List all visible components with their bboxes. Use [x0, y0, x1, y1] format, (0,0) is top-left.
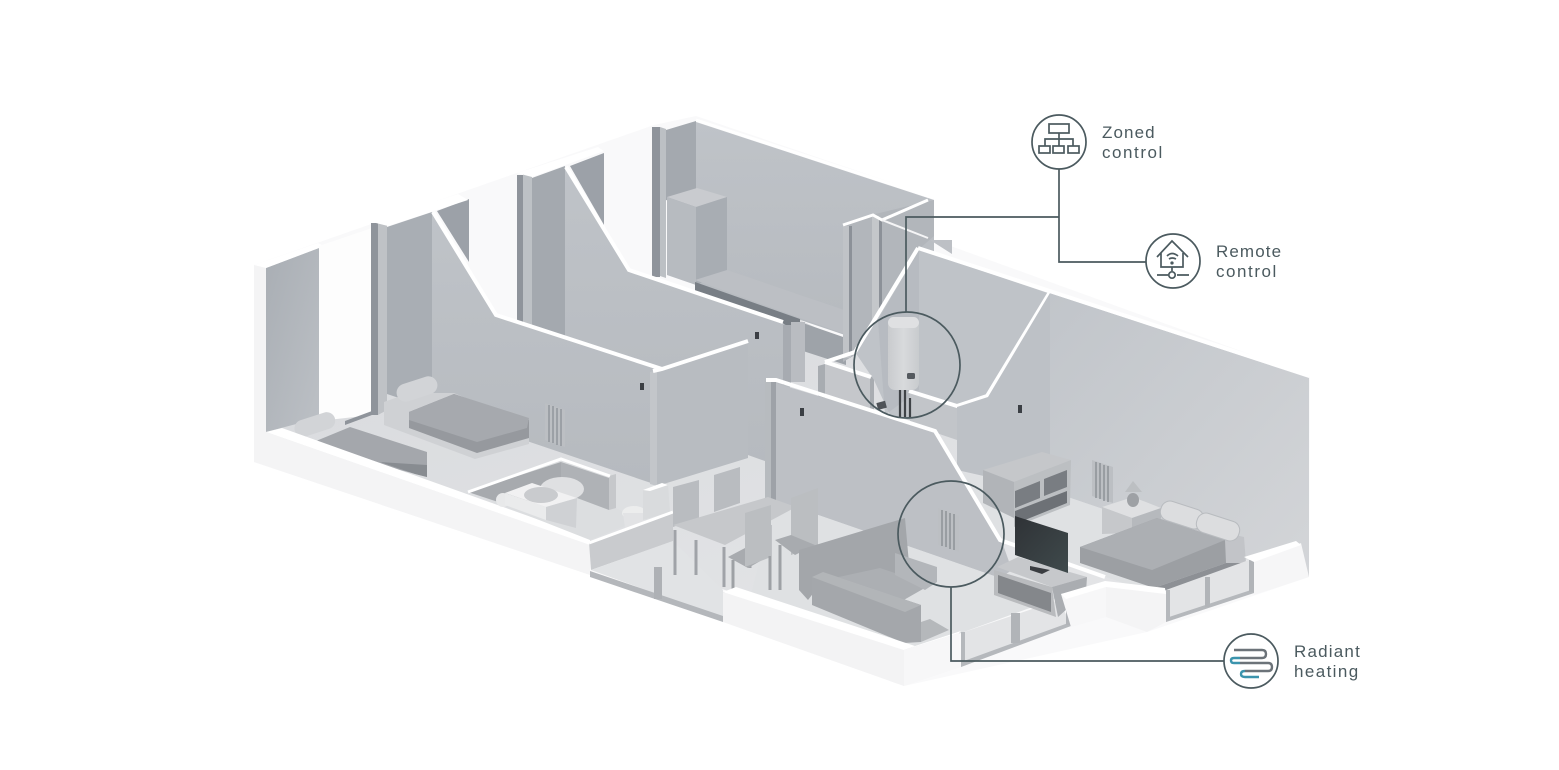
label: remote control: control — [1216, 262, 1278, 281]
label: zoned control: Zoned — [1102, 123, 1156, 142]
table legs — [675, 525, 770, 587]
bathroom — [468, 458, 640, 540]
dining table and chairs — [673, 467, 818, 590]
label: remote control: Remote — [1216, 242, 1282, 261]
shelf unit — [983, 452, 1071, 527]
left bedroom partition wall — [371, 194, 748, 486]
switch: living room — [800, 408, 804, 416]
floor: living room — [750, 500, 1060, 650]
kitchen counter — [695, 270, 850, 365]
radiator: left bedroom — [545, 403, 565, 447]
apartment model — [254, 116, 1310, 686]
callout: remote control — [1146, 234, 1282, 288]
balcony — [589, 511, 725, 622]
floor — [265, 320, 1302, 650]
nightstand with lamp — [1102, 481, 1161, 534]
callout: zoned control — [1032, 115, 1164, 169]
icon: zoned control — [1032, 115, 1086, 169]
connector: zoned and remote control — [1059, 169, 1146, 262]
icon: radiant heating — [1224, 634, 1278, 688]
pillow right — [1194, 511, 1242, 543]
window post — [1011, 613, 1020, 643]
room: top back room — [652, 120, 934, 365]
boiler pipes — [900, 390, 910, 417]
toilet — [622, 483, 670, 535]
front wall: apex — [723, 587, 961, 686]
callouts — [854, 169, 1224, 661]
tv stand — [994, 557, 1087, 617]
bathtub — [540, 477, 584, 501]
sofa — [799, 518, 949, 643]
table top — [673, 497, 796, 545]
connector: radiant heating — [951, 587, 1224, 661]
chair back centre — [714, 467, 740, 512]
balcony post — [654, 567, 662, 599]
chair front — [728, 548, 771, 568]
connector: boiler — [906, 217, 1059, 312]
chair right — [791, 488, 818, 555]
double bed — [1080, 499, 1246, 594]
icon: remote control — [1146, 234, 1200, 288]
partition wall end — [650, 341, 748, 486]
column and back corner — [843, 200, 952, 362]
pillow left — [1158, 499, 1206, 531]
label: zoned control: control — [1102, 143, 1164, 162]
alcove wall — [855, 250, 1048, 430]
low wall — [818, 364, 874, 420]
radiator: right bedroom — [1092, 460, 1113, 503]
front left thick wall — [254, 265, 590, 575]
highlight circle: radiator — [898, 481, 1004, 587]
switch: middle bedroom — [755, 332, 759, 339]
right bedroom walls — [818, 248, 1310, 592]
front wall: right end — [1244, 541, 1309, 595]
bed: left bedroom — [384, 374, 529, 459]
front window: right bedroom — [1166, 560, 1254, 622]
callout: radiant heating — [1224, 634, 1361, 688]
pillow — [292, 410, 337, 439]
living room wall — [765, 379, 1105, 578]
label: radiant heating: heating — [1294, 662, 1360, 681]
outer back wall — [254, 116, 1310, 686]
pillow — [394, 374, 440, 404]
wall controller — [876, 401, 887, 410]
room: middle bedroom — [517, 147, 805, 470]
switch: right bedroom — [1018, 405, 1022, 413]
radiator: living room — [938, 508, 959, 552]
sink unit — [505, 483, 577, 528]
far right wall — [1050, 293, 1309, 577]
low wall front — [910, 392, 957, 440]
bed: front left — [292, 410, 427, 477]
lamp — [1125, 481, 1142, 507]
front wall: jog — [1061, 581, 1166, 632]
television — [1015, 516, 1068, 574]
switch: left bedroom — [640, 383, 644, 390]
heating boiler unit — [876, 317, 919, 417]
right floor — [950, 470, 1250, 592]
window post — [1205, 577, 1210, 607]
chair back left — [673, 480, 699, 527]
highlight circle: boiler — [854, 312, 960, 418]
wardrobe — [667, 188, 727, 285]
room: left bedroom outer wall — [254, 228, 372, 432]
front window: living room — [961, 595, 1071, 667]
boiler display — [907, 373, 915, 379]
label: radiant heating: Radiant — [1294, 642, 1361, 661]
